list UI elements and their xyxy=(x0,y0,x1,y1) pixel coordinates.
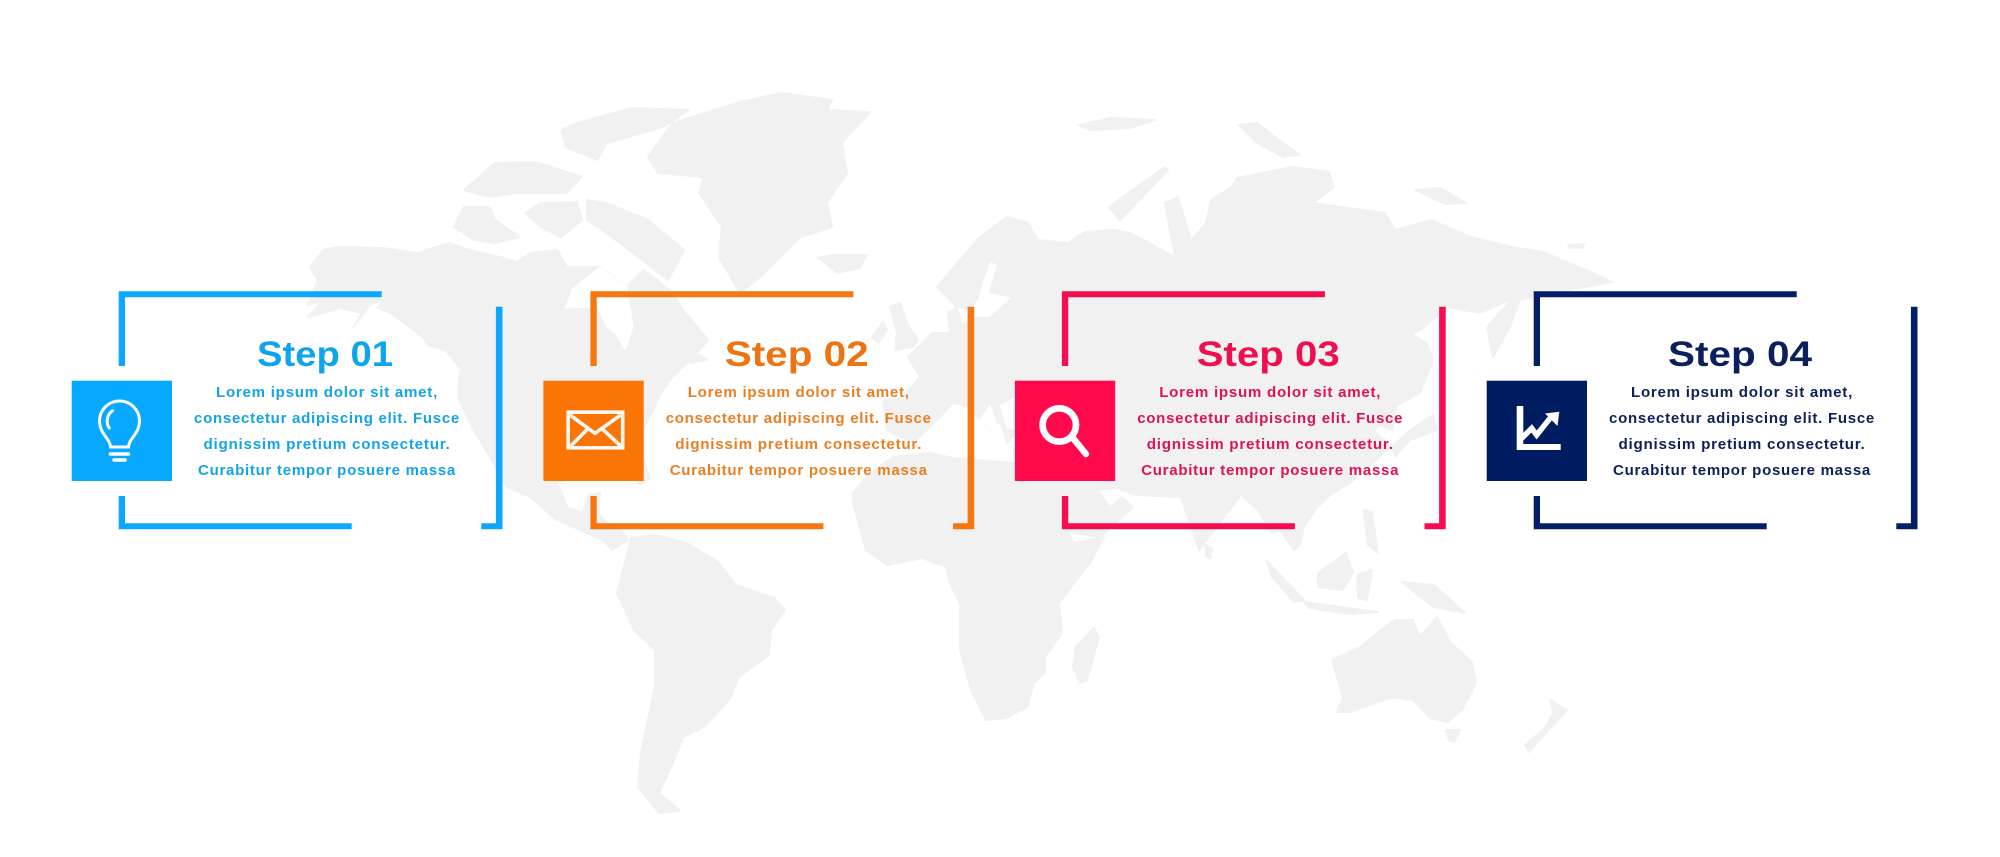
icon square xyxy=(1015,381,1115,481)
body text: Lorem ipsum dolor sit amet, xyxy=(1159,385,1381,401)
map: Hudson Bay and inlets xyxy=(352,267,690,403)
icon square xyxy=(72,381,172,481)
bracket frame xyxy=(1062,291,1446,529)
map: Japan xyxy=(1392,415,1437,457)
body text: consectetur adipiscing elit. Fusce xyxy=(1137,411,1403,427)
heading: Step 02 xyxy=(725,335,869,374)
body text: consectetur adipiscing elit. Fusce xyxy=(194,411,460,427)
icon: light bulb xyxy=(100,401,140,460)
bracket frame xyxy=(1534,291,1918,529)
map: North America xyxy=(308,243,708,550)
map: Iceland xyxy=(818,255,867,273)
body text xyxy=(1609,385,1875,479)
body text: Curabitur tempor posuere massa xyxy=(1141,463,1399,479)
body text: consectetur adipiscing elit. Fusce xyxy=(666,411,932,427)
icon square xyxy=(1487,381,1587,481)
panel: step 01 xyxy=(72,291,502,529)
body text: dignissim pretium consectetur. xyxy=(204,437,450,453)
map: Australia xyxy=(1332,617,1476,722)
panel: step 03 xyxy=(1015,291,1446,529)
map: New Zealand xyxy=(1525,700,1567,752)
body text: consectetur adipiscing elit. Fusce xyxy=(1609,411,1875,427)
icon square xyxy=(543,381,644,481)
body text: Lorem ipsum dolor sit amet, xyxy=(1631,385,1853,401)
panel: step 04 xyxy=(1487,291,1918,529)
body text: Lorem ipsum dolor sit amet, xyxy=(688,385,910,401)
body text xyxy=(194,385,460,479)
panel: step 02 xyxy=(543,291,974,529)
icon: envelope xyxy=(568,412,623,448)
bracket frame xyxy=(119,291,502,529)
map: Tasmania xyxy=(1446,730,1460,742)
body text: Lorem ipsum dolor sit amet, xyxy=(216,385,438,401)
icon: magnifier xyxy=(1043,408,1086,454)
body text: Curabitur tempor posuere massa xyxy=(1613,463,1871,479)
icon: growth chart xyxy=(1517,406,1561,450)
body text: dignissim pretium consectetur. xyxy=(675,437,922,453)
heading: Step 01 xyxy=(257,335,393,374)
map: Arctic Russia islands xyxy=(1079,118,1584,248)
heading: Step 03 xyxy=(1197,335,1340,374)
map: Southeast Asia islands xyxy=(1205,510,1465,614)
heading: Step 04 xyxy=(1668,335,1813,374)
world map background xyxy=(308,93,1612,813)
map: Madagascar xyxy=(1073,628,1099,683)
body text xyxy=(1137,385,1403,479)
map: inland seas xyxy=(980,395,1035,433)
body text: dignissim pretium consectetur. xyxy=(1147,437,1394,453)
map: Arctic islands xyxy=(454,108,689,280)
map: Africa xyxy=(853,453,1104,720)
map: Eurasia xyxy=(883,167,1612,550)
body text: Curabitur tempor posuere massa xyxy=(198,463,456,479)
body text: Curabitur tempor posuere massa xyxy=(670,463,928,479)
map: South America xyxy=(617,535,785,813)
body text: dignissim pretium consectetur. xyxy=(1618,437,1866,453)
bracket frame xyxy=(590,291,974,529)
body text xyxy=(666,385,932,479)
map: British Isles xyxy=(872,303,918,350)
map: Greenland xyxy=(648,93,870,293)
